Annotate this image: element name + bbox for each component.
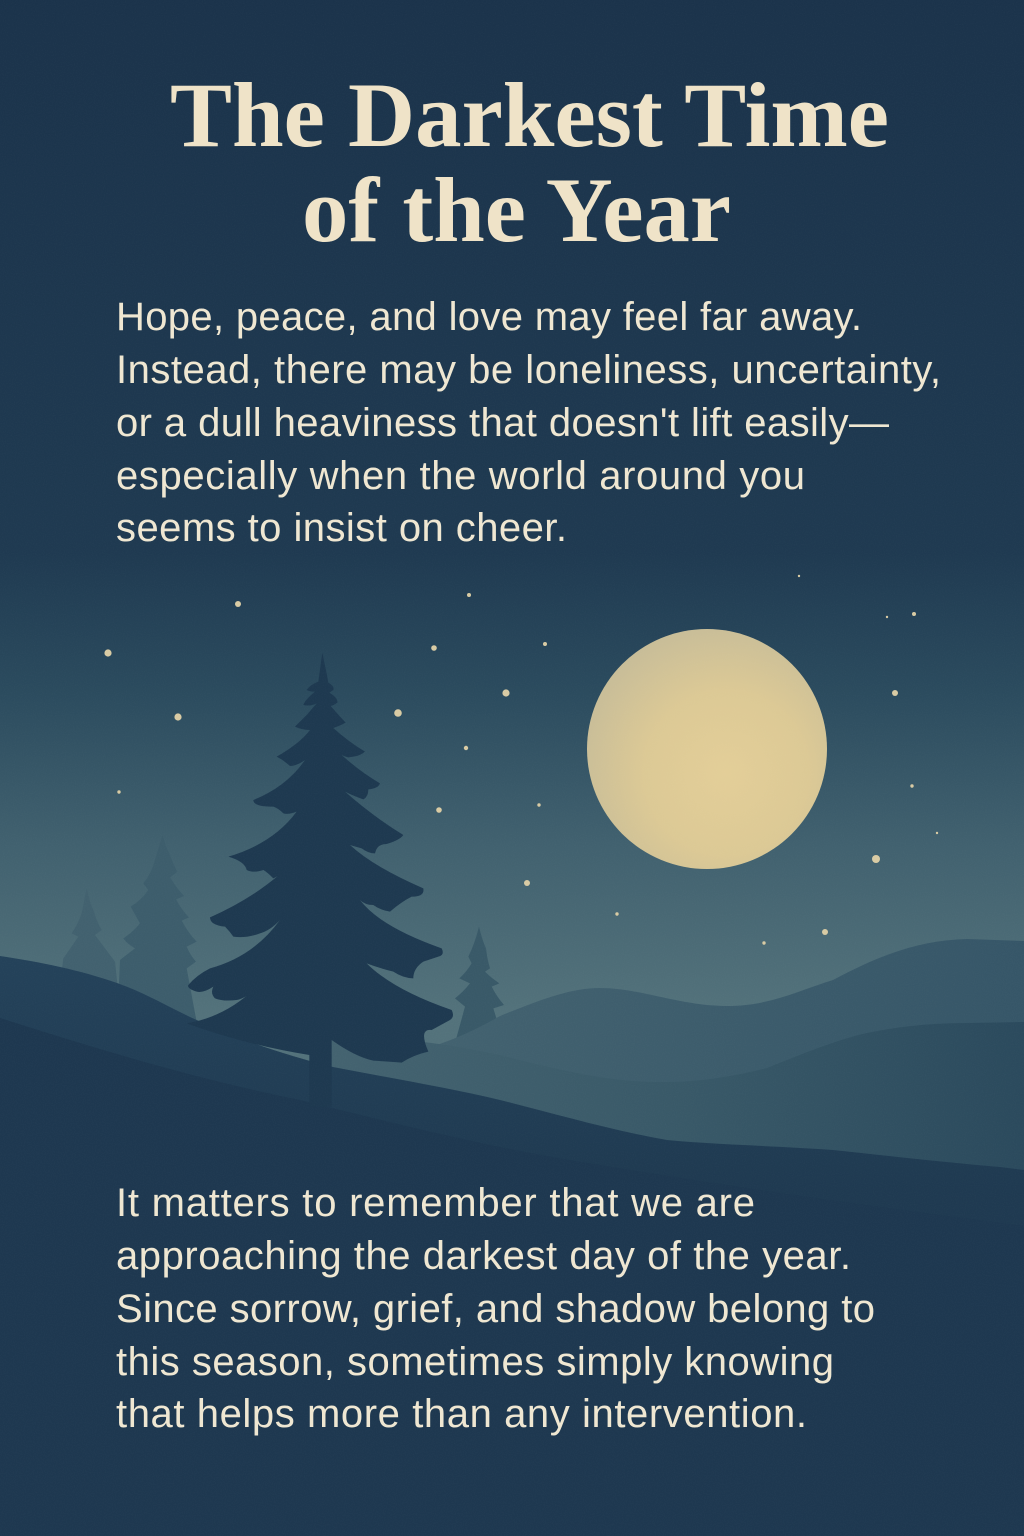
back hills — [330, 939, 1024, 1300]
near hill — [0, 956, 1024, 1536]
intro paragraph: seems to insist on cheer. — [116, 506, 567, 550]
closing paragraph — [116, 1181, 875, 1436]
intro paragraph — [116, 295, 941, 550]
distant small pine trees — [53, 835, 513, 1073]
intro paragraph: Instead, there may be loneliness, uncertainty, — [116, 348, 941, 392]
title — [170, 64, 889, 261]
title: of the Year — [302, 159, 731, 261]
closing paragraph: that helps more than any intervention. — [116, 1392, 807, 1436]
large pine tree — [187, 653, 453, 1107]
closing paragraph: It matters to remember that we are — [116, 1181, 755, 1225]
small pine right — [447, 927, 513, 1073]
title: The Darkest Time — [170, 64, 889, 166]
small pine left — [117, 835, 200, 1040]
intro paragraph: or a dull heaviness that doesn't lift easily— — [116, 401, 889, 445]
intro paragraph: especially when the world around you — [116, 454, 805, 498]
middle hills — [330, 1022, 1024, 1300]
closing paragraph: this season, sometimes simply knowing — [116, 1340, 834, 1384]
stars — [104, 575, 938, 945]
full moon — [587, 629, 827, 869]
closing paragraph: Since sorrow, grief, and shadow belong to — [116, 1287, 875, 1331]
foreground hill — [0, 1018, 1024, 1536]
intro paragraph: Hope, peace, and love may feel far away. — [116, 295, 862, 339]
small pine far left — [53, 888, 123, 1040]
closing paragraph: approaching the darkest day of the year. — [116, 1234, 851, 1278]
